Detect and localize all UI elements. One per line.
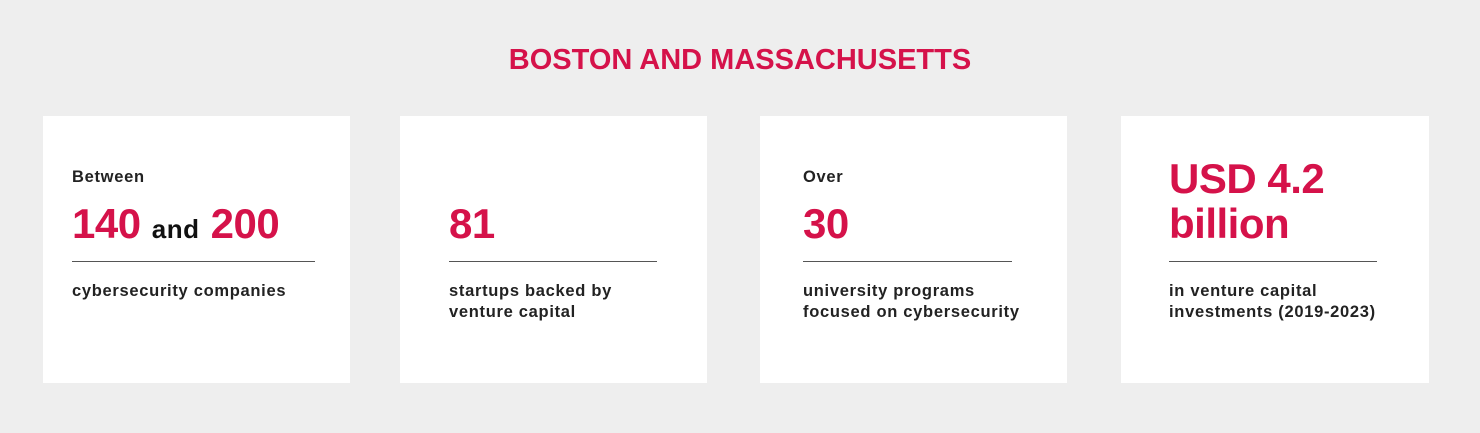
panel: startups (400, 116, 707, 383)
stat: 30: 30 (803, 200, 849, 247)
title: BOSTON AND MASSACHUSETTS (509, 44, 971, 76)
label: over: Over (803, 168, 843, 186)
description (803, 282, 1020, 321)
description: startups backed by (449, 282, 612, 300)
description: cybersecurity companies (72, 282, 286, 300)
stat: USD 4.2 billion (1169, 155, 1324, 247)
panel: venture capital (1121, 116, 1429, 383)
description (1169, 282, 1376, 321)
label: between: Between (72, 168, 145, 186)
panel: companies (43, 116, 350, 383)
stat: 81: 81 (449, 200, 495, 247)
description: university programs (803, 282, 975, 300)
stat: 140 and 200: 140 and 200 (72, 200, 279, 247)
panel: university programs (760, 116, 1067, 383)
description: in venture capital (1169, 282, 1317, 300)
stat: USD 4.2 billion: billion (1169, 200, 1289, 247)
description (449, 282, 612, 321)
stat: USD 4.2 billion: USD 4.2 (1169, 155, 1324, 202)
description: focused on cybersecurity (803, 303, 1020, 321)
description: venture capital (449, 303, 576, 321)
description: investments (2019-2023) (1169, 303, 1376, 321)
